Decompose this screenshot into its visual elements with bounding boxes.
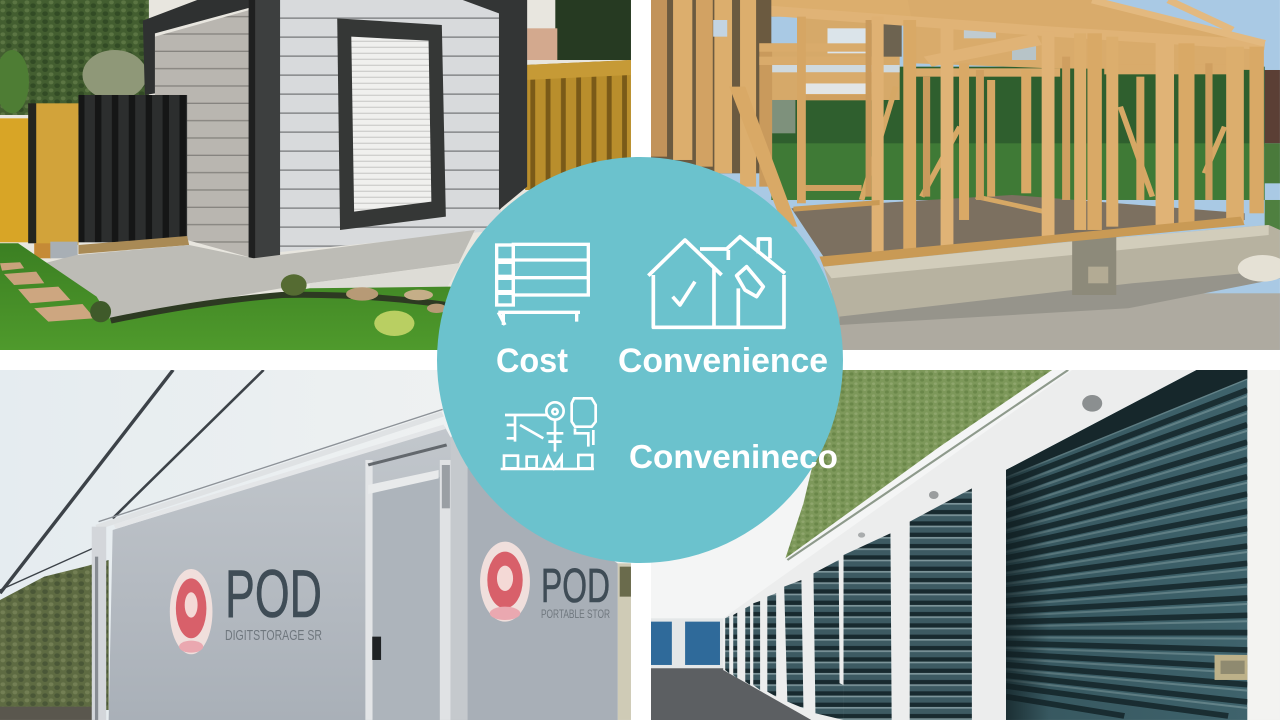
floor deck	[791, 195, 1245, 257]
panel: timber house frame photo	[651, 0, 1280, 350]
label: Cost: Cost	[496, 342, 568, 380]
ground	[823, 293, 1280, 350]
asphalt ground	[651, 668, 811, 720]
window crossbars	[759, 43, 872, 52]
tree behind building	[785, 370, 1052, 558]
far storage block	[651, 618, 723, 668]
container body	[92, 409, 618, 720]
shed corner post and trim	[143, 0, 527, 258]
background field	[760, 0, 1280, 230]
POD logo right	[480, 542, 530, 622]
icon: site plan	[501, 398, 596, 469]
door plate and bolts	[858, 395, 1247, 680]
lawn and path stones	[0, 243, 451, 350]
POD small caption left: DIGITSTORAGE SR	[225, 627, 322, 644]
POD wordmark right: POD	[541, 560, 610, 613]
wall studs	[797, 17, 806, 203]
building facade	[723, 370, 1280, 720]
shed window	[337, 18, 446, 230]
label: Convenineco: Convenineco	[629, 438, 838, 475]
corner post	[92, 527, 106, 720]
bottom plate	[819, 217, 1245, 267]
concrete slab	[44, 230, 475, 318]
panel: POD portable container photo	[0, 370, 631, 720]
diagonal braces	[862, 87, 1225, 213]
concrete foundation	[823, 225, 1280, 325]
panel: self-storage units photo	[651, 370, 1280, 720]
black gate	[78, 95, 189, 254]
end pillar	[1247, 370, 1280, 720]
shed front wall	[278, 0, 501, 252]
roof trusses and top plates	[900, 0, 1265, 70]
power lines	[0, 370, 264, 593]
left wall cluster	[651, 0, 771, 173]
POD logo left	[170, 569, 212, 654]
timber frame	[651, 0, 1265, 267]
icon: cost shelving	[497, 244, 588, 325]
central teal circle	[437, 157, 843, 563]
background trees	[0, 0, 631, 115]
label: Convenience: Convenience	[618, 342, 828, 380]
wooden fences	[0, 60, 631, 258]
POD small caption right: PORTABLE STOR	[541, 607, 610, 621]
smaller roller doors	[725, 488, 972, 720]
shed side wall	[155, 10, 249, 257]
panel: backyard shed photo	[0, 0, 631, 350]
top rails	[97, 414, 443, 527]
large roller door	[1006, 370, 1247, 720]
tree	[0, 560, 109, 720]
hedge border and plants	[90, 274, 447, 336]
door	[365, 460, 373, 720]
POD wordmark left: POD	[225, 556, 322, 632]
icon: houses	[648, 237, 785, 327]
